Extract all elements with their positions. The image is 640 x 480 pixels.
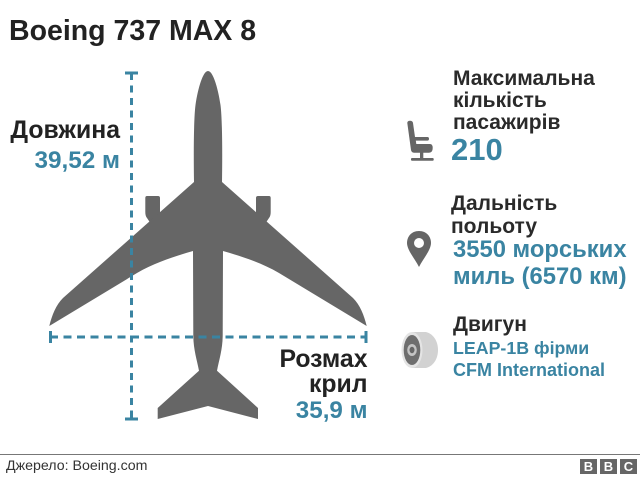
icon: airplane silhouette xyxy=(49,71,367,419)
wingspan label: 35,9 м xyxy=(296,397,368,424)
icon: engine xyxy=(402,332,438,368)
wingspan label: Розмах xyxy=(279,346,368,373)
length dimension line xyxy=(125,73,138,419)
wingspan dimension line xyxy=(50,331,366,343)
icon: seat xyxy=(407,120,434,161)
passengers value: 210 xyxy=(451,132,503,167)
range heading xyxy=(451,192,557,238)
source text: Джерело: Boeing.com xyxy=(6,458,147,474)
length label xyxy=(10,117,120,174)
divider xyxy=(0,454,640,455)
engine value: LEAP-1B фірми xyxy=(453,338,589,358)
range value xyxy=(453,236,627,290)
engine heading: Двигун xyxy=(453,313,527,336)
length label: Довжина xyxy=(10,117,120,144)
passengers heading: кількість xyxy=(453,89,547,112)
passengers heading: Максимальна xyxy=(453,67,595,90)
BBC logo: C xyxy=(624,459,633,474)
range value: миль (6570 км) xyxy=(453,263,627,290)
range value: 3550 морських xyxy=(453,236,627,263)
engine value: CFM International xyxy=(453,360,605,380)
wingspan label: крил xyxy=(309,371,368,398)
icon: map pin xyxy=(407,231,431,267)
passengers heading xyxy=(453,67,595,134)
BBC logo xyxy=(580,459,637,474)
wingspan label xyxy=(279,346,368,424)
title: Boeing 737 MAX 8 xyxy=(9,15,256,47)
passengers heading: пасажирів xyxy=(453,111,560,134)
range heading: польоту xyxy=(451,215,537,238)
BBC logo: B xyxy=(584,459,593,474)
range heading: Дальність xyxy=(451,192,557,215)
engine value xyxy=(453,338,605,380)
BBC logo: B xyxy=(604,459,613,474)
length label: 39,52 м xyxy=(34,147,120,174)
